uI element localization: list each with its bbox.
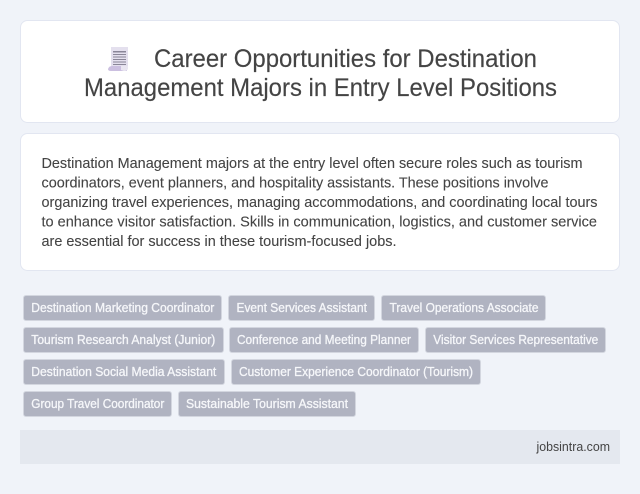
tag: Group Travel Coordinator: Group Travel Coordinator	[31, 397, 164, 411]
tag: Visitor Services Representative: Visitor Services Representative	[433, 333, 598, 347]
title: Career Opportunities for Destination	[154, 45, 537, 73]
description text: are essential for success in these tourism-focused jobs.	[42, 233, 396, 250]
tag: Travel Operations Associate: Travel Operations Associate	[390, 301, 538, 315]
title	[84, 45, 557, 102]
tag: Group Travel Coordinator	[24, 392, 172, 416]
tag: Visitor Services Representative	[426, 328, 606, 352]
description text: coordinators, event planners, and hospitality assistants. These positions involve	[42, 174, 548, 192]
title: Management Majors in Entry Level Positions	[84, 74, 557, 102]
tag: Sustainable Tourism Assistant	[178, 392, 356, 416]
tag: Destination Social Media Assistant: Destination Social Media Assistant	[31, 365, 217, 379]
tag: Customer Experience Coordinator (Tourism): Customer Experience Coordinator (Tourism)	[239, 365, 473, 379]
description text: organizing travel experiences, managing accommodations, and coordinating local tours	[42, 194, 598, 211]
icon: paper scroll	[108, 47, 128, 71]
tag: Travel Operations Associate	[382, 296, 546, 320]
tag: Event Services Assistant: Event Services Assistant	[236, 301, 367, 315]
description text	[42, 155, 598, 250]
tag: Destination Marketing Coordinator	[24, 296, 222, 320]
description text: Destination Management majors at the entry level often secure roles such as tourism	[42, 155, 582, 172]
panel: title header	[20, 20, 620, 122]
footer site name: jobsintra.com	[536, 440, 610, 454]
tag: Destination Marketing Coordinator: Destination Marketing Coordinator	[31, 301, 214, 315]
panel: description	[20, 134, 620, 270]
tag: Customer Experience Coordinator (Tourism)	[232, 360, 480, 384]
tag: Conference and Meeting Planner: Conference and Meeting Planner	[237, 333, 411, 347]
tag: Tourism Research Analyst (Junior)	[24, 328, 224, 352]
panel: job title tags	[24, 296, 606, 416]
tag: Destination Social Media Assistant	[24, 360, 224, 384]
tag: Sustainable Tourism Assistant: Sustainable Tourism Assistant	[186, 397, 348, 411]
tag: Conference and Meeting Planner	[230, 328, 418, 352]
tag: Tourism Research Analyst (Junior): Tourism Research Analyst (Junior)	[31, 333, 215, 347]
tag: Event Services Assistant	[228, 296, 374, 320]
description text: to enhance visitor satisfaction. Skills in communication, logistics, and customer service	[42, 214, 597, 230]
footer bar	[20, 430, 620, 464]
